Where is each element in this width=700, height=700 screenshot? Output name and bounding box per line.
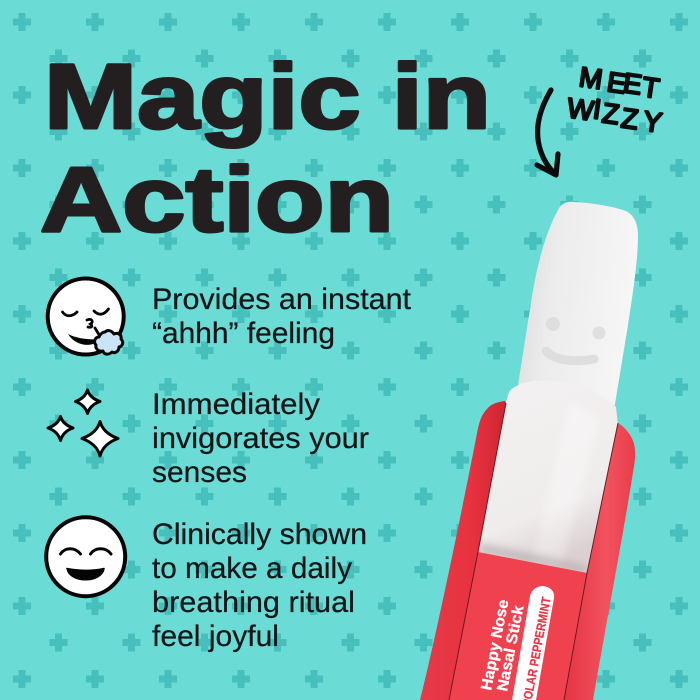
arrow pointing at stick: [537, 90, 558, 175]
benefit 3: text: to make a daily: [152, 552, 352, 585]
label product name: Happy Nose: [478, 598, 513, 692]
benefit 3: smiling face icon: [46, 517, 125, 596]
benefit 3: text: Clinically shown: [152, 518, 367, 551]
benefit 3: text: breathing ritual: [152, 586, 355, 619]
benefit 2: text: Immediately: [152, 388, 320, 421]
breath cloud: [95, 331, 123, 354]
benefit 1: text: Provides an instant: [152, 283, 411, 316]
red case left side: [420, 401, 506, 700]
benefit 2: text: [152, 388, 369, 489]
benefit 2: text: senses: [152, 456, 247, 489]
stick white tip with smiley: [518, 202, 638, 410]
label product name: [478, 598, 528, 693]
title: [40, 46, 491, 251]
title: Magic in: [44, 46, 491, 148]
benefit 1: sleepy face icon: [48, 278, 124, 354]
benefit 1: text: “ahhh” feeling: [152, 317, 335, 350]
handwritten callout: meet wizzy: [565, 61, 664, 139]
label product name: Nasal Stick: [494, 604, 528, 693]
benefit 3: text: feel joyful: [152, 620, 279, 653]
handwritten callout: meet wizzy: WIZZY: [565, 92, 664, 139]
title: Action: [40, 149, 394, 251]
benefit 1: text: [152, 283, 411, 350]
benefit 2: sparkles icon: [48, 390, 118, 456]
red label panel: [449, 403, 618, 700]
product: nasal stick: [420, 202, 638, 700]
red case right side: [564, 423, 635, 700]
stick collar and lower body: [478, 381, 618, 574]
handwritten callout: meet wizzy: MEET: [577, 61, 661, 104]
benefit 3: text: [152, 518, 367, 653]
benefit 2: text: invigorates your: [152, 422, 369, 455]
